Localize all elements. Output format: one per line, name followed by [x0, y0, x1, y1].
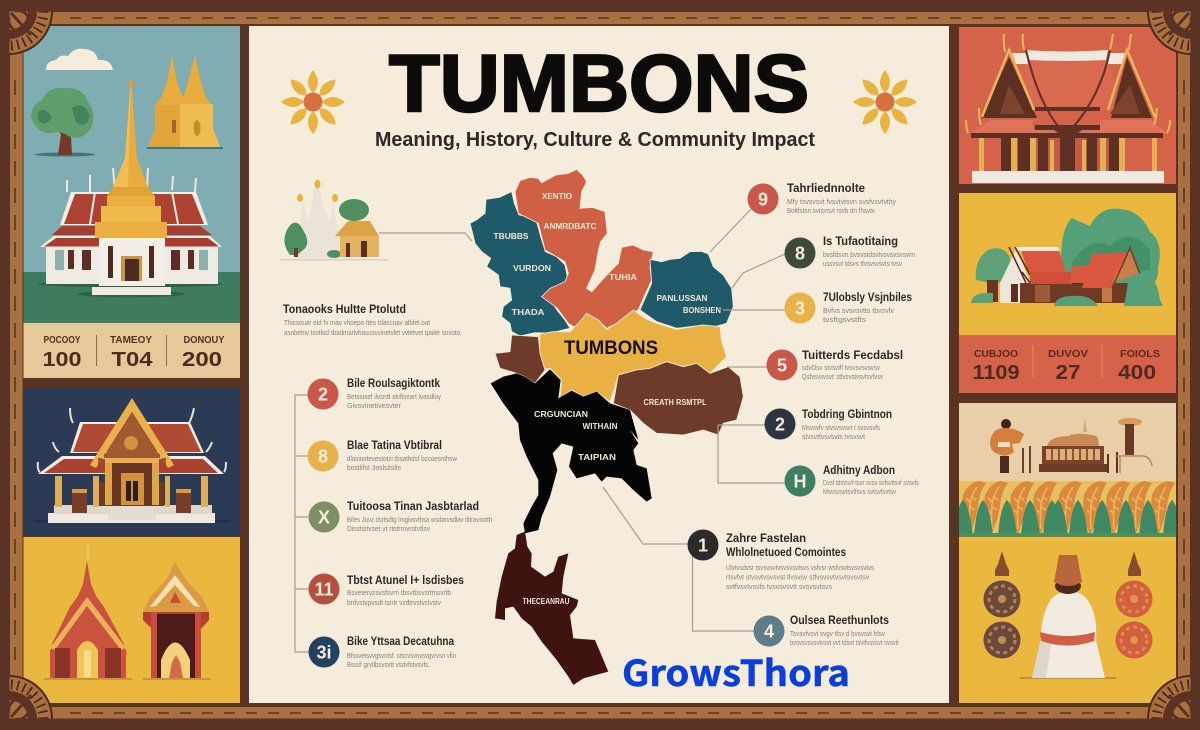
item: right 1: rtsvfvt stvsvtvsvsvst tlvsvsv stfvsvsvtvsvtsvsvtsv: [726, 572, 869, 582]
panel: navy temple: [24, 388, 240, 536]
item: right 8: Is Tufaotitaing: [823, 236, 898, 248]
map labels: CRGUNCIAN: [534, 409, 588, 419]
item: right 1: 1: [698, 536, 708, 556]
item: right 9: Mfy tsvsvsvt fvsvtvtsvn svsfvsvtvthy: [787, 197, 896, 206]
map labels: THADA: [512, 307, 544, 317]
map labels: TBUBBS: [494, 231, 529, 241]
item: right 1: Zahre Fastelan: [726, 533, 806, 545]
item: right 4: 4: [764, 622, 774, 642]
item: right H: Dvsf tdsvsvf-tsvr svsv svfsvtlsvf svsvfs: [823, 478, 919, 487]
item: right 1: Ulvtvsdvsr tsvsvsvtvsvsvsvtsvs vsfvsr wsfvsvtsvsvsvtvs: [726, 563, 874, 572]
item: right 3: 7Ulobsly Vsjnbiles: [823, 292, 912, 304]
panel: left statistics: [24, 323, 240, 378]
item: right H: H: [794, 472, 806, 492]
item: left 5: Bike Yttsaa Decatuhna: [347, 636, 455, 648]
item: right 4: [754, 615, 899, 647]
map labels: VURDON: [513, 263, 551, 273]
panel: right statistics: CUBJOO: [974, 348, 1018, 360]
map labels: [494, 191, 721, 606]
item: right 5: [766, 350, 903, 381]
icon: flower left: [281, 70, 345, 134]
icon: tree: [31, 88, 95, 156]
item: left 3: [308, 501, 492, 533]
item: left 4: Bsvetervzsvsfsvrn tbsvtbsvsrtmsvrtb: [347, 588, 451, 597]
panel: golden temple: [24, 26, 240, 323]
map labels: TUHIA: [609, 272, 637, 282]
region: east teal: [640, 251, 733, 328]
panel: left statistics: TAMEOY: [110, 334, 152, 346]
item: left 5: Bfssvetsvvgsvntsf. stscvsvnvsvgvrvsn vfin: [347, 651, 456, 660]
right connectors: [603, 208, 785, 631]
icon: golden stupas: [147, 55, 223, 149]
map labels: WITHAIN: [582, 421, 618, 431]
item: left 1: Givsvinetivesvter: [347, 401, 401, 410]
item: left 1: [308, 378, 441, 410]
item: right H: Msvsvsvtsvtfsvs svtsvfsvtsv: [823, 487, 896, 496]
region: central yellow: [539, 310, 727, 402]
map labels: PANLUSSAN: [656, 293, 708, 303]
item: left 2: [308, 440, 457, 472]
item: right 8: ussvsvt tdsvs tfvsvsvsvts tvsv: [823, 259, 902, 268]
item: right 4: bvsvsvsvsvtvsvt vvt tdsvt tsvtfvsvsvt svsvlr: [790, 638, 899, 647]
map labels: THECEANRAU: [522, 596, 570, 606]
icon: left ornaments: [984, 551, 1020, 658]
item: right 9: 9: [758, 190, 768, 210]
panel: red temple: [959, 27, 1176, 184]
item: right 8: [784, 236, 915, 268]
item: left 4: 11: [314, 580, 334, 600]
panel: right statistics: 400: [1118, 362, 1156, 384]
item: left 5: Bsssf grvtlbsvsvtt vsdvfstvsvfs.: [347, 660, 430, 669]
panel: right statistics: 1109: [972, 362, 1020, 384]
item: left 3: Bifes Juvz dsrtsdtg Imgivsvthsa wsdarvsdlav tlitravsotth: [347, 515, 492, 524]
map labels: TUMBONS: [564, 338, 658, 359]
icon: farmer: [990, 419, 1030, 473]
map of tumbons: [470, 169, 743, 685]
icon: red shrine: [44, 545, 132, 680]
panel: left statistics: DONOUY: [184, 334, 224, 346]
icon: village hall: [1039, 418, 1117, 473]
item: right 2: stvsvtfvsvsvts tvsvsvt: [802, 432, 866, 441]
item: right 2: Tobdring Gbintnon: [802, 409, 892, 421]
text: temple caption: Tonaooks Hultte Ptolutd: [283, 304, 406, 316]
panel: left statistics: 100: [42, 349, 82, 371]
panel: left statistics: POCOOY: [44, 334, 80, 346]
panel: left statistics: 200: [182, 349, 222, 371]
item: left 4: Tbtst Atunel I+ lsdisbes: [347, 575, 464, 587]
left connector tree: [295, 395, 310, 652]
panel: rice field: [954, 481, 1182, 537]
watermark: GrowsThora: GrowsThora: [622, 645, 850, 697]
item: right 1: Whlolnetuoed Comointes: [726, 547, 846, 559]
panel: right statistics: FOIOLS: [1120, 348, 1160, 360]
icon: flower right: [853, 70, 917, 134]
item: left 4: bnfvstvpvsdt tsntr vzdtrvstvclvstv: [347, 598, 441, 607]
map labels: XENTIO: [542, 191, 572, 201]
item: right 1: svtfvsvtvsvfs tvsvsvsvtt svsvsvtsvs: [726, 582, 832, 591]
item: left 3: X: [318, 508, 330, 528]
item: left 5: [308, 636, 456, 669]
item: right 2: [764, 408, 892, 441]
item: right 4: Tsvsvfvsvt svgv tfsv d bvsvsvt fdsv: [790, 629, 885, 638]
connector: temple to map: [379, 233, 472, 241]
item: right H: Adhitny Adbon: [823, 465, 895, 477]
region: west teal: [470, 192, 570, 336]
item: right 1: [688, 530, 874, 591]
item: right 3: [784, 292, 912, 324]
item: right 5: Tuitterds Fecdabsl: [802, 350, 903, 362]
item: left 1: Bile Roulsagiktontk: [347, 378, 441, 390]
item: right 8: 8: [795, 244, 805, 264]
title: TUMBONS: [389, 39, 809, 129]
map labels: TAIPIAN: [578, 452, 616, 462]
item: left 2: dlasinotevestotzi tbsathdsf bzcoesnthsw: [347, 454, 457, 463]
panel: right statistics: 27: [1056, 362, 1080, 384]
map labels: BONSHEN: [683, 305, 721, 315]
region: central black: [491, 369, 652, 533]
item: right 3: Bvfvs svsvsvtts tbvsvfv: [823, 306, 894, 315]
map labels: ANMRDBATC: [544, 221, 596, 231]
region: southern maroon: [495, 532, 608, 685]
panel: yellow shrines: [24, 537, 240, 703]
item: right 9: [748, 183, 896, 215]
icon: ceremonial stand: [1115, 418, 1152, 473]
item: left 2: Blae Tatina Vbtibral: [347, 440, 442, 452]
item: left 4: [308, 574, 464, 607]
map labels: CREATH RSMTPL: [644, 397, 706, 407]
icon: cloud: [46, 49, 113, 70]
region: west brown: [495, 335, 545, 383]
item: right 4: Oulsea Reethunlots: [790, 615, 889, 627]
item: right 5: Qsfvsvsvsvt' stfvsvstvsvtsvfvsv: [802, 372, 883, 381]
item: right 9: Boltfstsn svtsvsvt rsvb dn fhsvtv: [787, 206, 875, 215]
item: left 2: 8: [318, 446, 328, 466]
item: left 1: Betsiusef ilvsrdt alvfiseart lvasdloy: [347, 392, 441, 401]
panel: centre: [249, 26, 949, 703]
item: right 5: sdvOsv stvsvtfl tvsvsvsvsvsv: [802, 363, 880, 372]
text: temple caption: [283, 304, 460, 337]
item: right 8: bvsfdsvn bvsvstdsvtvsvsvsvsvrn: [823, 250, 915, 259]
item: left 1: 2: [318, 384, 328, 404]
text: temple caption: Thicsouar eld fv mav vhoepo ttes tdascuav albfel oat: [284, 318, 431, 327]
panel: left statistics: T04: [112, 349, 154, 371]
item: right 9: Tahrliednnolte: [787, 183, 865, 195]
panel: village house: [959, 193, 1176, 336]
item: right 3: 3: [795, 298, 805, 318]
text: temple caption: asnbetnv tsotlscl tbadmarlvhasusvvinetvlet vvtetvet tpaler snvoto: [284, 328, 460, 337]
item: left 3: Disstsitvset vt rtstrmvrstvtlsv: [347, 524, 430, 533]
panel: right statistics: [959, 335, 1176, 393]
icon: dark shrine: [143, 562, 211, 680]
item: right 2: 2: [775, 414, 785, 434]
item: right 2: Msvsvfv stvsvsvsvt t svsvsvfs: [802, 423, 880, 432]
item: right 5: 5: [777, 356, 787, 376]
item: right H: [784, 465, 919, 496]
icon: seated figure: [1020, 555, 1116, 679]
icon: small temple and hut: [280, 180, 388, 260]
panel: right statistics: DUVOV: [1048, 348, 1088, 360]
icon: right ornaments: [1116, 551, 1152, 658]
item: right 3: tvsftgsvstfts: [823, 315, 866, 324]
item: left 2: bostlifst 3oslsitslts: [347, 463, 401, 472]
item: left 5: 3i: [316, 642, 332, 662]
region: east brown: [613, 362, 743, 435]
item: left 3: Tuitoosa Tinan Jasbtarlad: [347, 501, 479, 513]
panel: village life: [959, 403, 1176, 481]
panel: ceremony figure: [959, 537, 1176, 703]
subtitle: Meaning, History, Culture & Community Impact: [375, 129, 815, 151]
icon: main temple: [38, 76, 222, 298]
region: north orange: [515, 169, 653, 328]
